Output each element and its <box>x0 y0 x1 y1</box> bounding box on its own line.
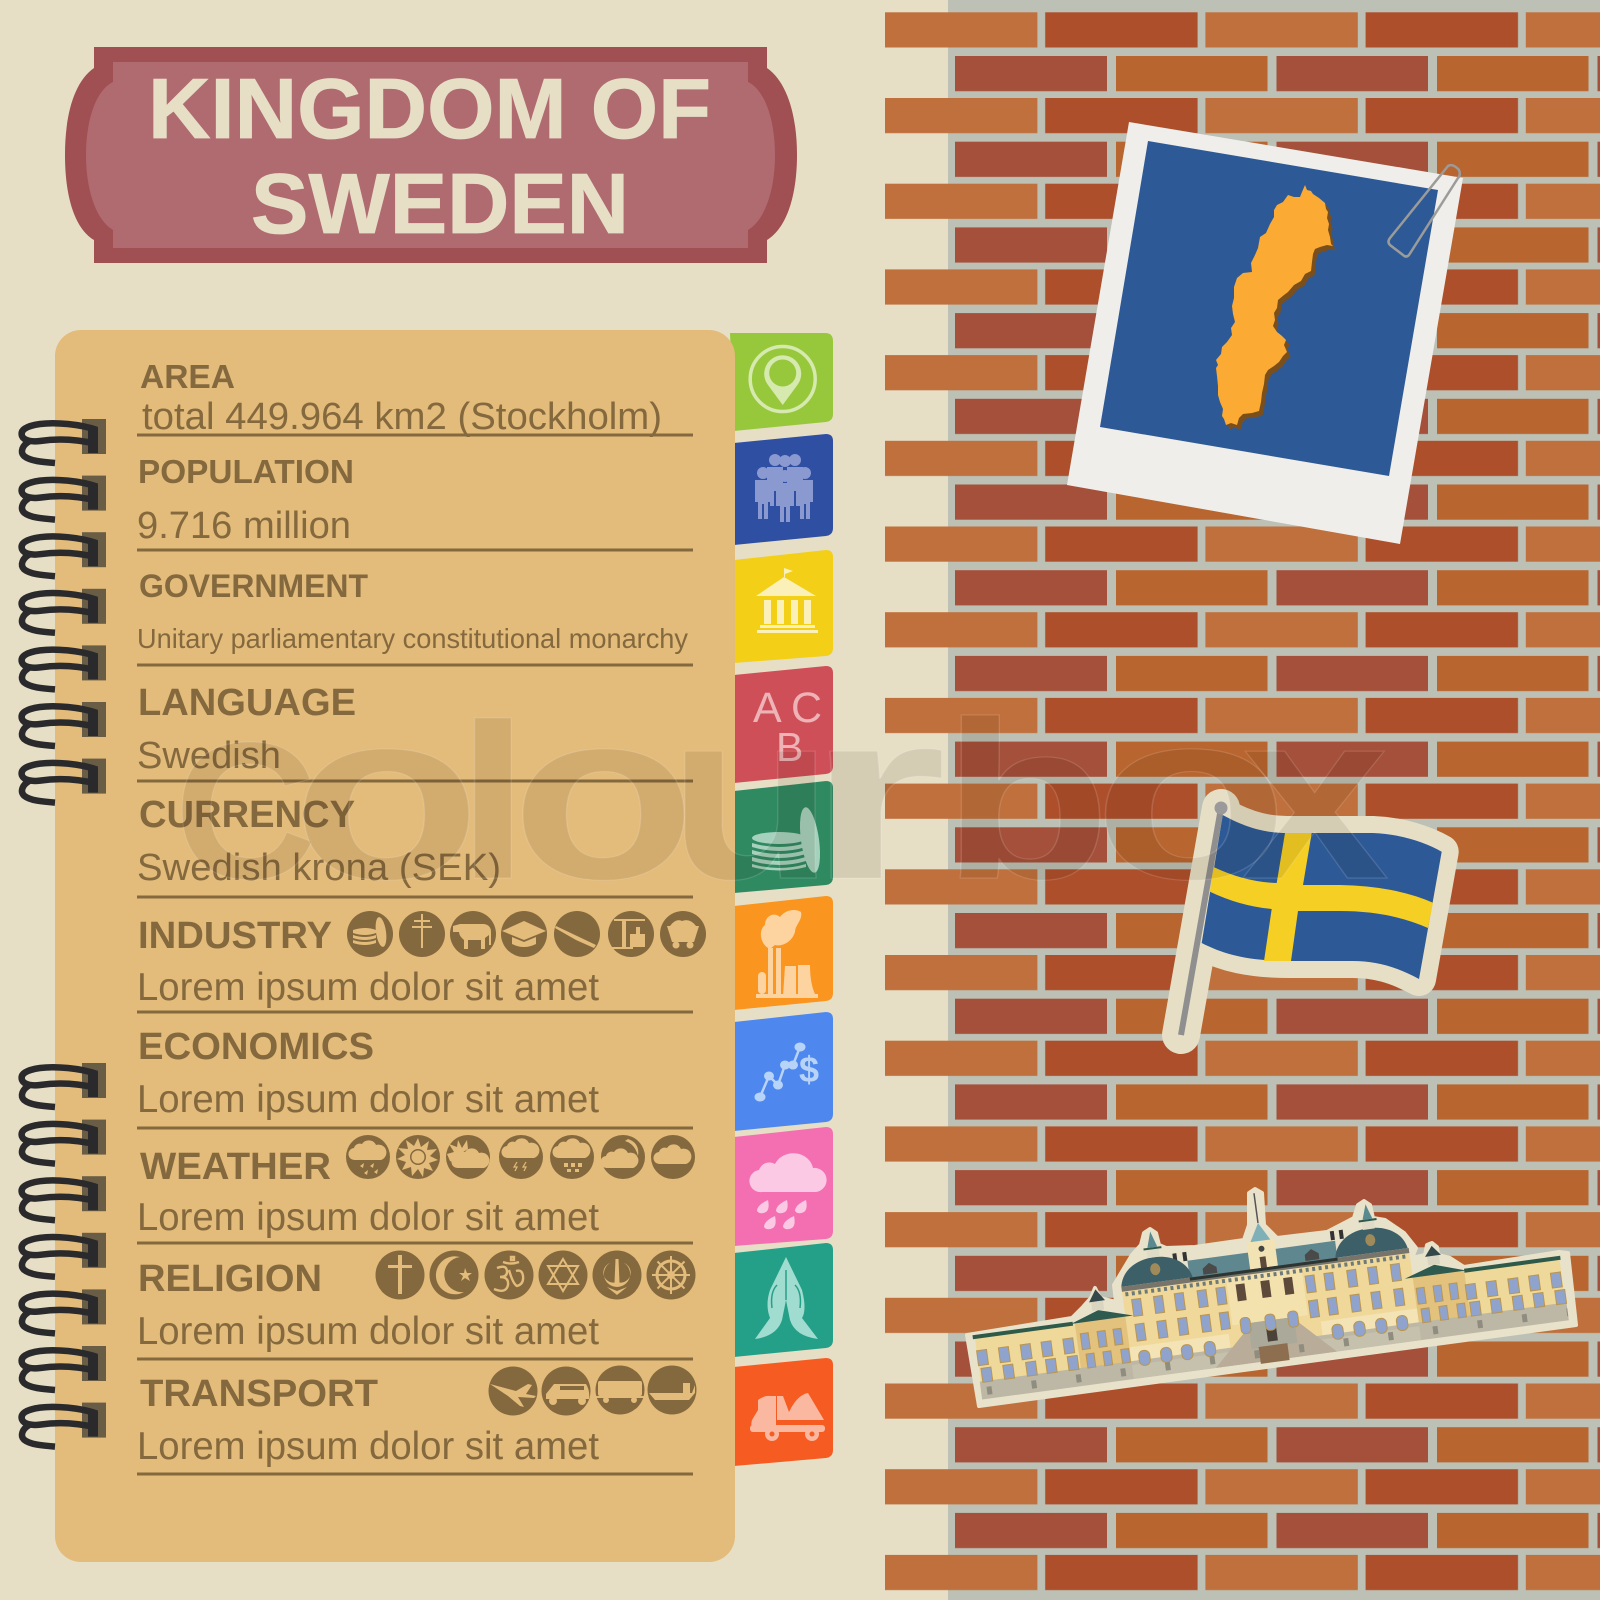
row: currency: Swedish krona (SEK) <box>137 847 501 889</box>
map: Sweden <box>1216 185 1333 425</box>
title plaque <box>65 47 797 263</box>
tab: language: B <box>776 724 803 770</box>
row: transport <box>137 1366 696 1476</box>
watermark: r <box>806 661 947 929</box>
palace building <box>959 1154 1569 1402</box>
row: weather <box>137 1135 695 1244</box>
row: government: GOVERNMENT <box>139 568 368 604</box>
row: language <box>137 682 693 782</box>
info rows <box>137 358 706 1476</box>
weather icons <box>346 1135 695 1179</box>
row: currency <box>137 794 693 898</box>
Swedish flag sticker <box>1181 802 1442 1035</box>
row: transport: TRANSPORT <box>140 1373 378 1415</box>
watermark: o <box>292 661 481 929</box>
row: area: AREA <box>140 358 235 395</box>
tab: language: A <box>753 684 782 732</box>
brick wall <box>885 0 1600 1600</box>
watermark: x <box>1241 661 1389 929</box>
watermark <box>174 661 1389 929</box>
row: religion <box>137 1250 696 1360</box>
row: economics: ECONOMICS <box>138 1026 374 1068</box>
spiral binding bottom <box>22 1063 106 1447</box>
row: economics: Lorem ipsum dolor sit amet <box>137 1078 599 1121</box>
industry icons <box>347 911 706 957</box>
watermark: o <box>511 661 696 929</box>
flag pole <box>1181 802 1228 1035</box>
notebook panel <box>55 330 735 1562</box>
tab: economics <box>734 1012 833 1131</box>
spiral binding top <box>22 419 106 803</box>
row: area: total 449.964 km2 (Stockholm) <box>142 396 662 438</box>
watermark: b <box>942 674 1111 926</box>
tab: weather <box>734 1127 833 1246</box>
flag cloth <box>1202 815 1442 979</box>
row: government <box>137 568 693 666</box>
row: weather: Lorem ipsum dolor sit amet <box>137 1196 599 1239</box>
tab: language <box>734 666 833 783</box>
row: economics <box>137 1026 693 1130</box>
photo with map of Sweden <box>1067 122 1463 544</box>
tab: industry <box>734 896 833 1010</box>
paperclip <box>1388 165 1460 256</box>
watermark: l <box>456 678 530 925</box>
row: language: Swedish <box>137 735 281 777</box>
religion icons <box>376 1250 696 1300</box>
title line two: SWEDEN <box>251 157 629 252</box>
row: population <box>137 453 693 552</box>
tab: government <box>734 550 833 663</box>
tab: population <box>734 434 833 545</box>
row: currency: CURRENCY <box>139 794 355 836</box>
row: area <box>137 358 693 438</box>
tab: economics: $ <box>799 1049 819 1090</box>
tab: area <box>730 333 833 431</box>
row: transport: Lorem ipsum dolor sit amet <box>137 1425 599 1468</box>
map: Sweden shadow <box>1220 190 1336 430</box>
row: industry: INDUSTRY <box>138 915 332 957</box>
transport icons <box>488 1366 696 1416</box>
tab: currency <box>734 781 833 893</box>
row: industry <box>137 911 706 1014</box>
row: government: Unitary parliamentary constitutional monarchy <box>137 623 688 654</box>
row: religion: RELIGION <box>138 1258 322 1300</box>
flag cross <box>1210 833 1433 961</box>
watermark: u <box>668 661 834 929</box>
row: population: POPULATION <box>138 453 354 490</box>
row: industry: Lorem ipsum dolor sit amet <box>137 966 599 1009</box>
watermark: C <box>174 702 317 920</box>
colored index tabs <box>730 333 833 1466</box>
row: religion: Lorem ipsum dolor sit amet <box>137 1310 599 1353</box>
tab: language: C <box>791 684 822 732</box>
row: language: LANGUAGE <box>138 682 356 724</box>
palace sticker <box>959 1154 1576 1406</box>
tab: transport <box>734 1358 833 1466</box>
tab: religion <box>734 1243 833 1357</box>
row: population: 9.716 million <box>137 505 351 547</box>
row: weather: WEATHER <box>140 1146 331 1188</box>
title: KINGDOM OF <box>148 62 711 157</box>
watermark: o <box>1093 661 1289 929</box>
